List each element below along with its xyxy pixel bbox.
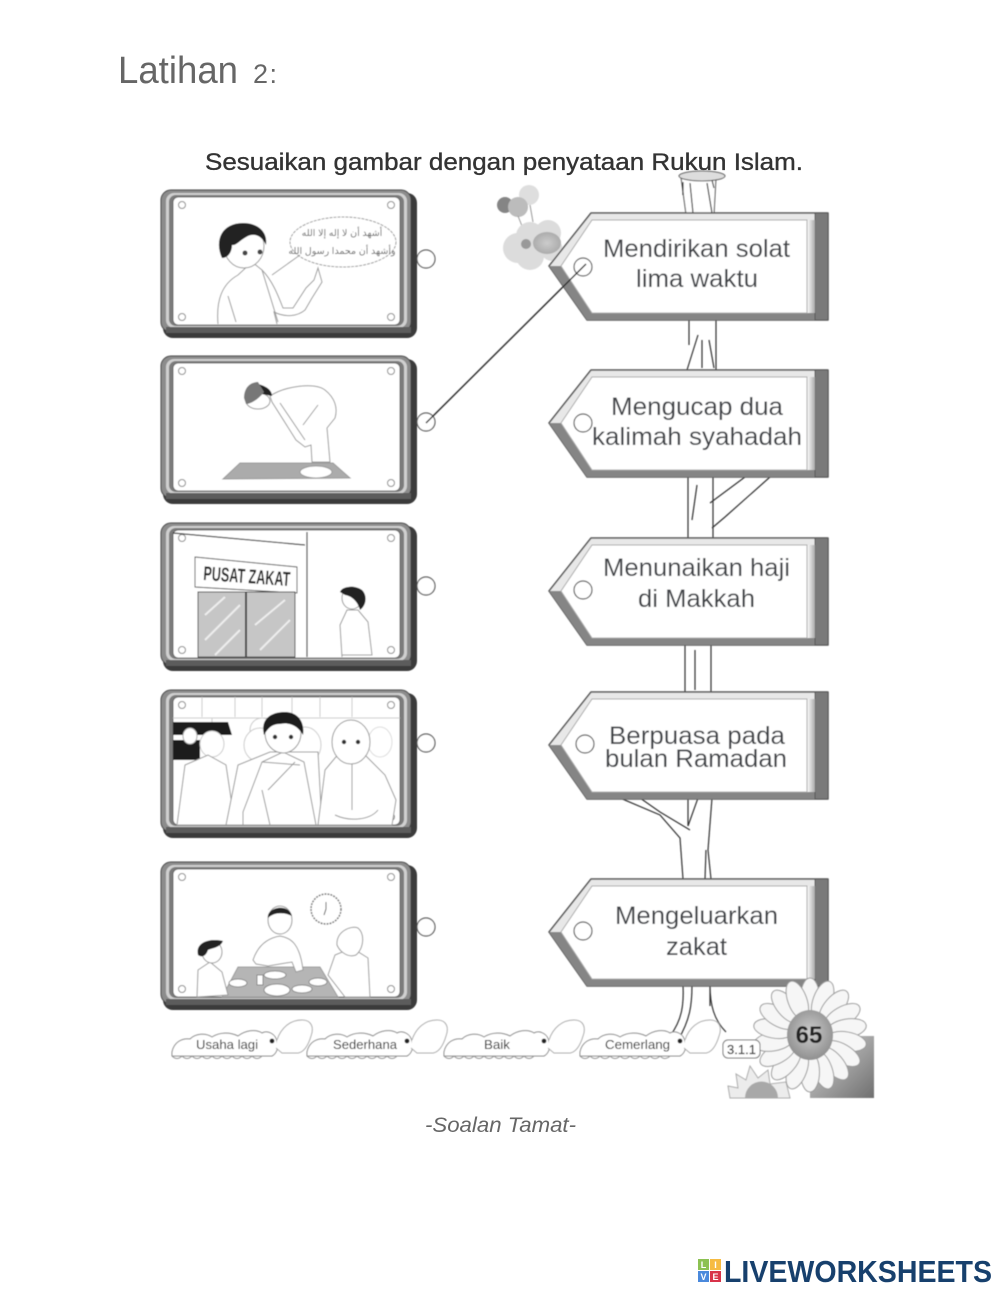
petals	[752, 978, 868, 1092]
caterpillar: Baik	[444, 1020, 584, 1058]
logo: Liveworksheets: L	[701, 1260, 707, 1270]
sign: Menunaikan haji di Makkah: Menunaikan haji	[603, 554, 790, 582]
sign: Pusat Zakat: PUSAT ZAKAT	[203, 563, 291, 591]
sign: Berpuasa pada bulan Ramadan	[549, 692, 828, 799]
caterpillar: Sederhana	[307, 1020, 447, 1058]
flower with page number: 65	[796, 1022, 822, 1049]
boy in ihram	[243, 712, 316, 825]
caterpillar: Usaha lagi: Usaha lagi	[196, 1038, 258, 1052]
Kaaba	[173, 722, 232, 760]
boy pointing at speech bubble	[218, 223, 322, 324]
signpost tree	[620, 171, 770, 1040]
logo: Liveworksheets: E	[712, 1272, 719, 1282]
speech bubble with Arabic text: أشهد أن لا إله إلا الله	[302, 226, 383, 239]
flower with page number	[728, 978, 874, 1098]
worksheet illustration	[161, 171, 874, 1098]
sign: Menunaikan haji di Makkah: di Makkah	[638, 585, 755, 613]
worksheet heading: Sesuaikan gambar dengan penyataan Rukun Islam.	[205, 149, 803, 176]
man centre	[253, 906, 303, 972]
crowd	[177, 718, 392, 825]
sign: Menunaikan haji di Makkah	[549, 538, 828, 645]
caterpillar: Cemerlang	[580, 1020, 720, 1058]
logo: Liveworksheets: V	[700, 1272, 707, 1282]
sign: Mengucap dua kalimah syahadah: Mengucap dua	[611, 393, 783, 421]
skill code label: 3.1.1	[727, 1042, 756, 1057]
title: 2:	[253, 59, 277, 89]
self-rating caterpillars	[172, 1020, 720, 1058]
prayer mat	[223, 463, 350, 479]
sign: Mengucap dua kalimah syahadah	[549, 370, 828, 477]
caterpillar: Baik: Baik	[484, 1038, 511, 1052]
logo: Liveworksheets: I	[714, 1260, 717, 1270]
picture card: zakat centre	[161, 523, 417, 671]
speech bubble with Arabic text	[272, 217, 396, 275]
sign: Mengeluarkan zakat: Mengeluarkan	[615, 902, 778, 930]
title: Latihan	[118, 50, 238, 92]
glass doors	[198, 592, 295, 657]
matching line	[426, 264, 586, 423]
small flower	[728, 1066, 790, 1098]
closing note: -Soalan Tamat-	[425, 1114, 576, 1137]
speech bubble with Arabic text: وأشهد أن محمدا رسول الله	[288, 244, 396, 257]
picture card: family eating at table	[161, 862, 417, 1010]
woman right	[328, 927, 370, 997]
sign: Mengucap dua kalimah syahadah: kalimah syahadah	[592, 423, 802, 451]
caterpillar: Cemerlang: Cemerlang	[605, 1038, 670, 1052]
boy bowing	[244, 382, 336, 478]
sign: Mendirikan solat lima waktu: Mendirikan solat	[603, 235, 790, 263]
picture card: bowing in prayer	[161, 356, 417, 504]
caterpillar: Usaha lagi	[172, 1020, 312, 1058]
caterpillar: Sederhana: Sederhana	[333, 1038, 397, 1052]
boy standing	[340, 587, 372, 657]
picture card: pilgrims at Makkah	[161, 690, 417, 838]
sign: Berpuasa pada bulan Ramadan: bulan Ramadan	[605, 745, 787, 773]
sign: Mengeluarkan zakat: zakat	[666, 933, 727, 961]
sign: Mendirikan solat lima waktu	[549, 213, 828, 320]
sign: Mengeluarkan zakat	[549, 879, 828, 986]
boy left	[197, 940, 228, 997]
table with plates	[222, 967, 338, 997]
wall clock	[311, 894, 341, 924]
picture card: reciting the shahada	[161, 190, 417, 338]
sign: Mendirikan solat lima waktu: lima waktu	[636, 265, 758, 293]
skill code label	[723, 1040, 760, 1058]
matching circles	[417, 250, 594, 940]
woman in headscarf	[318, 720, 396, 825]
decoration: balloons and sheep	[497, 185, 563, 270]
sign: Berpuasa pada bulan Ramadan: Berpuasa pada	[609, 722, 785, 750]
sign: Pusat Zakat	[195, 557, 297, 593]
